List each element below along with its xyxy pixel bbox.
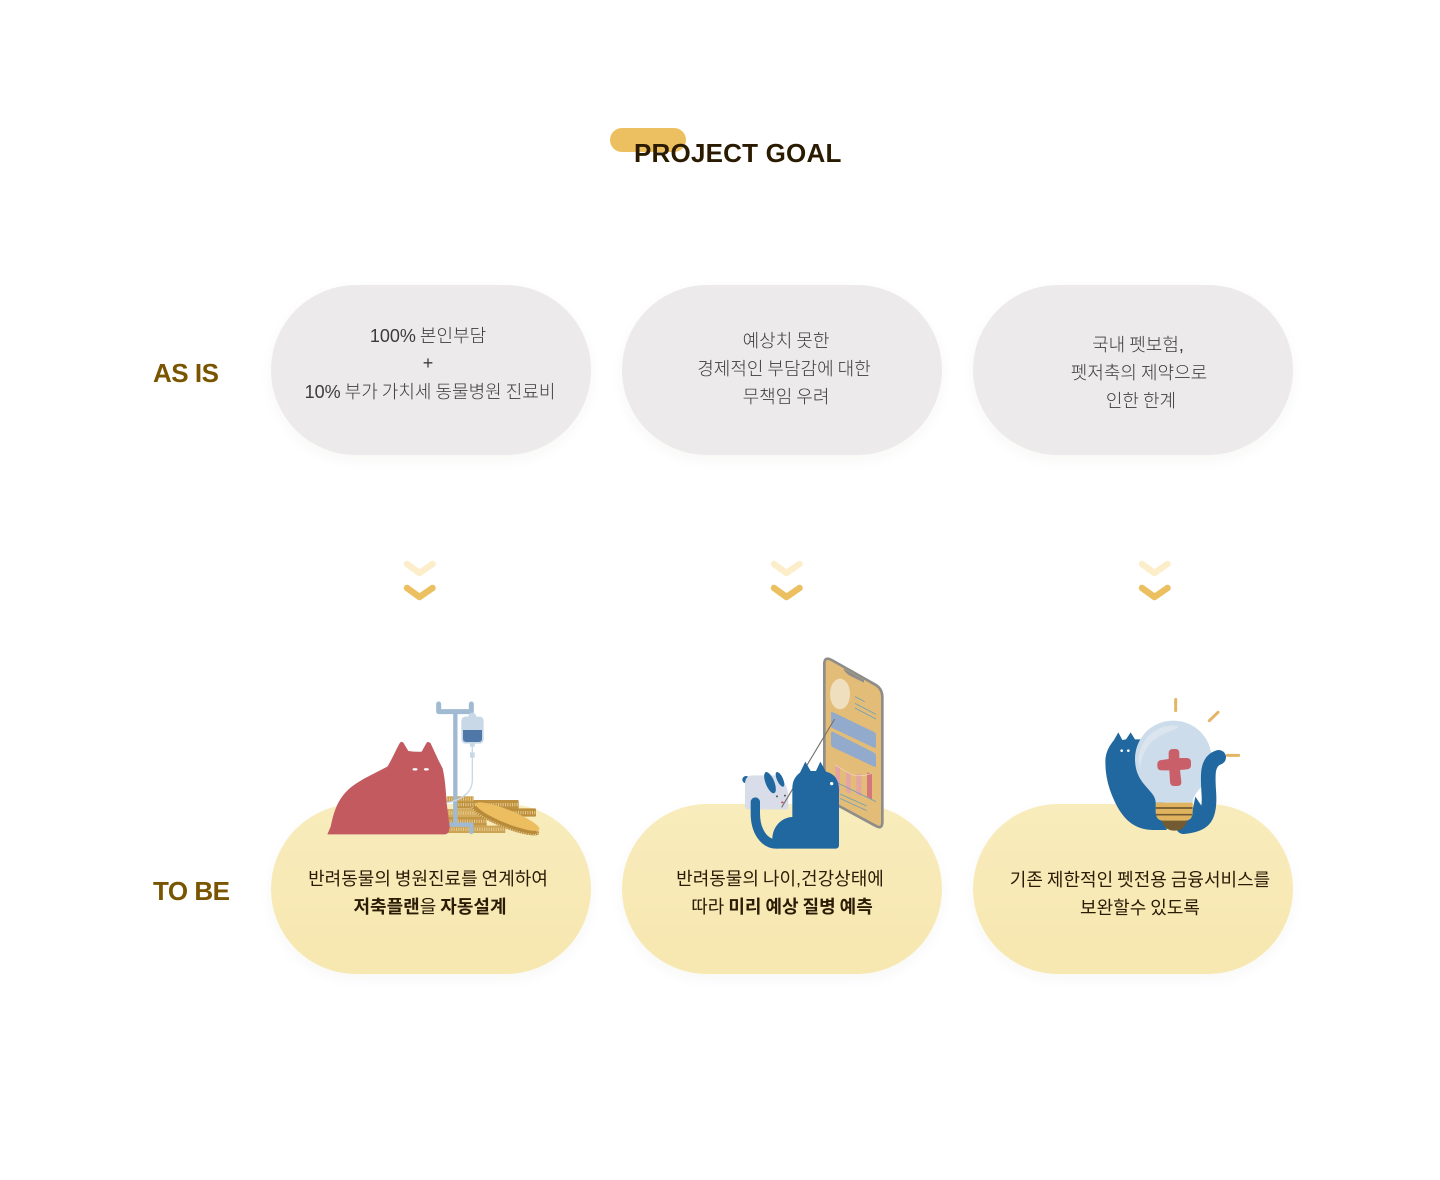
coin stacks [447, 796, 536, 833]
row label: to be: TO BE [153, 876, 229, 906]
text: as is 1 line 2: + [423, 353, 433, 373]
text: to be 1 line 1: 반려동물의 병원진료를 연계하여 [308, 869, 548, 889]
red cat [327, 742, 450, 834]
cat eyes [412, 768, 417, 770]
rabbit [742, 771, 788, 809]
cat eye [830, 782, 833, 785]
bulb glass [1135, 721, 1212, 803]
text: to be 3 line 2: 보완할수 있도록 [1080, 898, 1200, 918]
IV bag [461, 713, 484, 747]
phone screen photo [830, 679, 850, 709]
phone [824, 659, 882, 827]
panel: to be 3 [973, 804, 1293, 974]
panel: as is 3 [973, 285, 1293, 455]
title text: PROJECT GOAL [634, 138, 842, 168]
text: to be 1 line 2: 저축플랜을 자동설계 [353, 897, 507, 917]
bulb base [1156, 803, 1193, 831]
text: as is 3 line 1: 국내 펫보험, [1092, 335, 1184, 355]
large coin [468, 798, 542, 841]
text: as is 2 line 2: 경제적인 부담감에 대한 [697, 359, 871, 379]
text: as is 3 line 3: 인한 한계 [1106, 391, 1176, 411]
cat body [1105, 732, 1167, 830]
arrow: chevrons 3 [1138, 560, 1171, 600]
phone notch [843, 668, 864, 683]
text: as is 1 line 1: 100% 본인부담 [370, 326, 486, 346]
phone text lines [855, 697, 876, 719]
icon: blue cat with light bulb [1105, 699, 1239, 831]
panel: as is 1 [271, 285, 591, 455]
arrow: chevrons 2 [770, 560, 803, 600]
title [610, 128, 842, 168]
IV tube [447, 743, 472, 803]
text: as is 2 line 3: 무책임 우려 [743, 387, 829, 407]
text: as is 1 line 3: 10% 부가 가치세 동물병원 진료비 [305, 382, 555, 402]
panel: as is 2 [622, 285, 942, 455]
panel: to be 1 [271, 804, 591, 974]
text: as is 3 line 2: 펫저축의 제약으로 [1071, 363, 1207, 383]
text: to be 3 line 1: 기존 제한적인 펫전용 금융서비스를 [1010, 870, 1270, 890]
icon: red cat with IV drip and coins [327, 704, 542, 841]
row label: as is: AS IS [153, 358, 218, 388]
text: to be 2 line 2: 따라 미리 예상 질병 예측 [691, 897, 873, 917]
panel: to be 2 [622, 804, 942, 974]
phone cards [831, 712, 876, 748]
blue cat [755, 762, 839, 849]
icon: blue cat with rabbit and phone [742, 659, 882, 849]
cat hind [1190, 797, 1202, 823]
title highlight pill [610, 128, 686, 152]
rays [1176, 699, 1239, 755]
pointer stick [782, 719, 835, 807]
phone chart [835, 765, 876, 811]
medical cross [1157, 749, 1191, 786]
IV stand [439, 704, 471, 832]
text: as is 2 line 1: 예상치 못한 [743, 331, 829, 351]
arrow: chevrons 1 [404, 560, 436, 600]
text: to be 2 line 1: 반려동물의 나이,건강상태에 [676, 869, 884, 889]
cat tail [1183, 757, 1219, 827]
cat eyes [1120, 749, 1123, 752]
